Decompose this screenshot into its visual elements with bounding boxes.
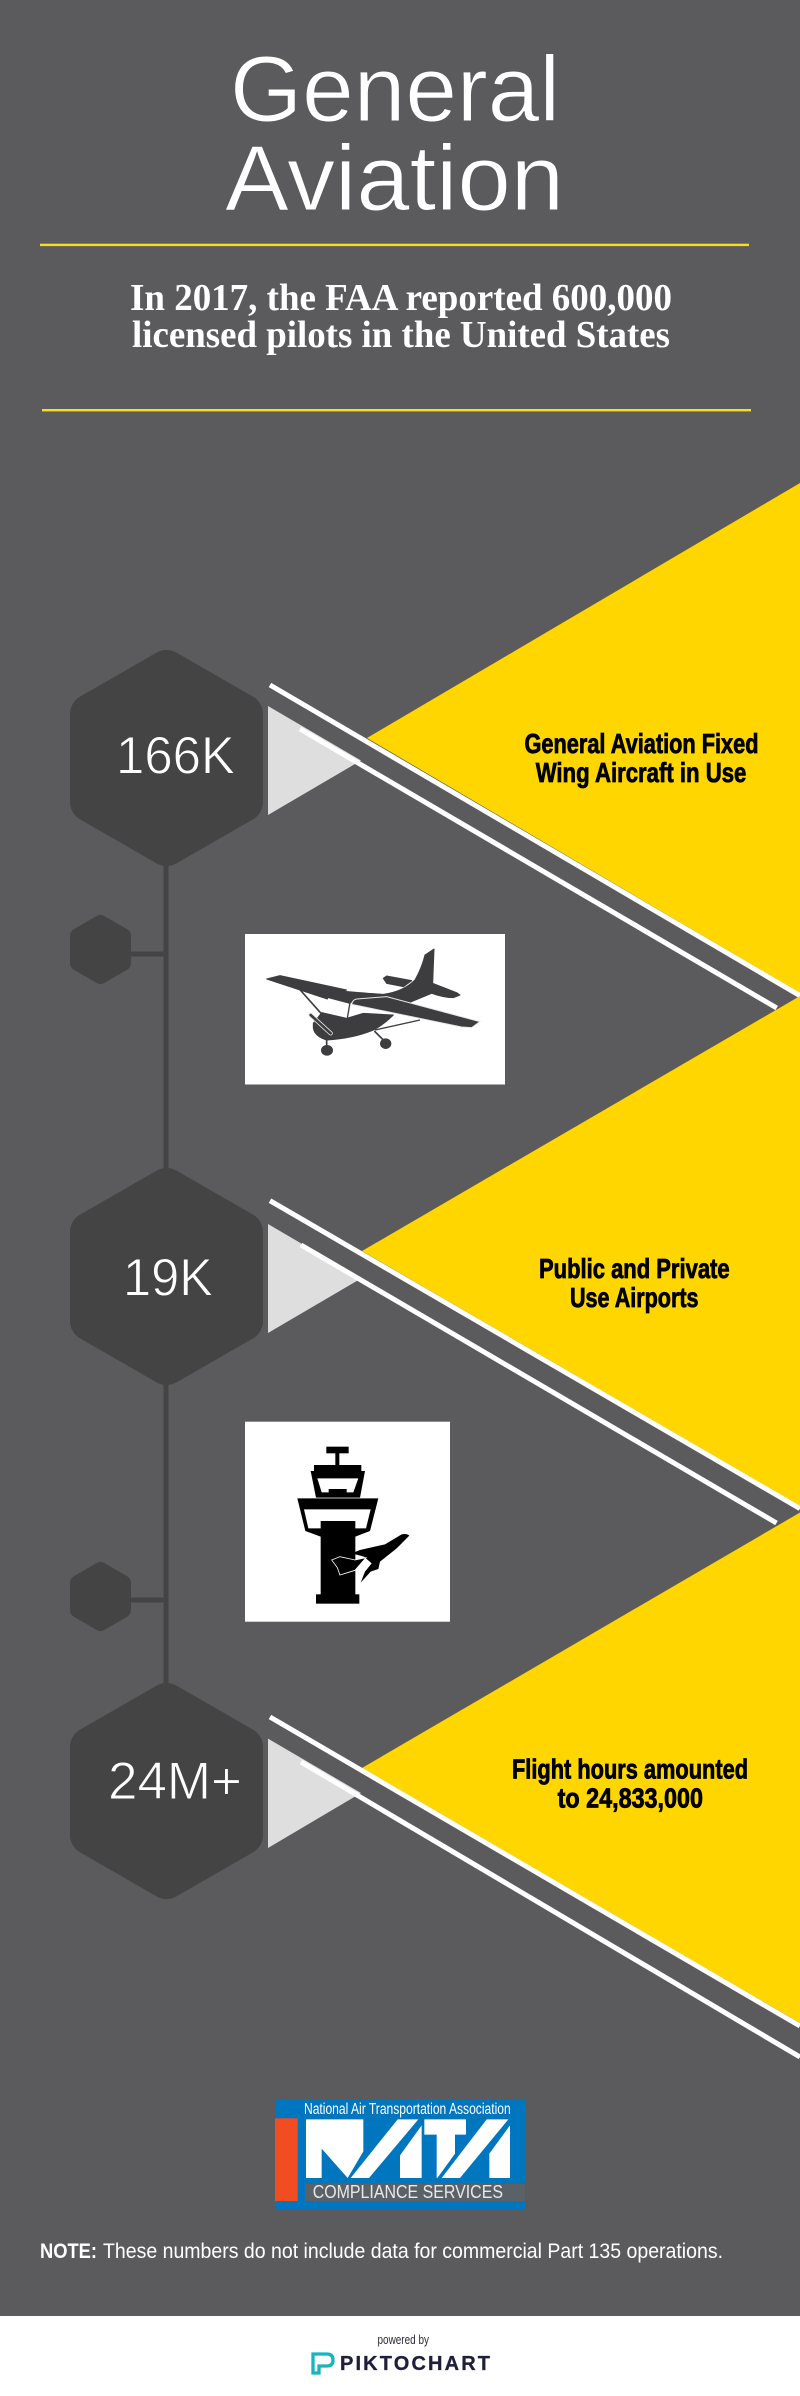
- banner text 3: [512, 1754, 748, 1814]
- title: General: [230, 37, 560, 141]
- subtitle: In 2017, the FAA reported 600,000: [130, 277, 672, 319]
- icon: plane: [267, 949, 480, 1056]
- panel: flight hours: [90, 1512, 800, 2057]
- hexagon 166K: 166K: [116, 727, 235, 786]
- yellow banner 3: [362, 1512, 800, 2023]
- panel: plane image: [245, 934, 505, 1084]
- title: Aviation: [225, 126, 564, 230]
- hexagon 24M+: [90, 1703, 243, 1879]
- panel: fixed wing aircraft: [90, 483, 800, 1008]
- panel: airports: [90, 996, 800, 1523]
- hexagon 19K: 19K: [123, 1249, 213, 1308]
- logo: NATA compliance services: National Air Transportation Association: [304, 2101, 511, 2118]
- banner text 1: [524, 728, 758, 788]
- logo: NATA compliance services: [275, 2099, 525, 2209]
- panel: tower image: [245, 1422, 450, 1622]
- yellow banner 2: [362, 996, 800, 1506]
- subtitle: licensed pilots in the United States: [132, 314, 670, 356]
- yellow banner 1: [367, 483, 800, 993]
- banner text 1: Wing Aircraft in Use: [536, 757, 746, 788]
- note: NOTE:: [40, 2240, 97, 2263]
- banner text 2: [539, 1253, 730, 1313]
- title: [225, 37, 564, 230]
- pointer triangle 1: [268, 706, 361, 815]
- footer: [0, 2316, 800, 2396]
- runway lines 3: [270, 1717, 800, 2057]
- note: These numbers do not include data for commercial Part 135 operations.: [103, 2240, 723, 2263]
- hexagon 24M+: 24M+: [108, 1752, 242, 1811]
- banner text 2: Public and Private: [539, 1253, 730, 1284]
- footer: powered by: [378, 2332, 429, 2347]
- timeline connector: [128, 860, 168, 1690]
- hexagon 166K: [90, 670, 243, 846]
- hexagon 19K: [90, 1188, 243, 1365]
- icon: piktochart logo: [313, 2354, 333, 2373]
- banner text 3: to 24,833,000: [558, 1782, 703, 1814]
- pointer triangle 2: [268, 1224, 361, 1333]
- runway lines 2: [270, 1201, 800, 1523]
- pointer triangle 3: [268, 1739, 361, 1848]
- small hexagon 1: [78, 923, 123, 976]
- footer: PIKTOCHART: [340, 2353, 490, 2375]
- runway lines 1: [270, 685, 800, 1008]
- banner text 2: Use Airports: [570, 1282, 698, 1313]
- small hexagon 2: [78, 1570, 123, 1623]
- icon: control tower: [297, 1447, 409, 1604]
- subtitle: [130, 277, 672, 356]
- logo: NATA compliance services: COMPLIANCE SERVICES: [313, 2182, 503, 2202]
